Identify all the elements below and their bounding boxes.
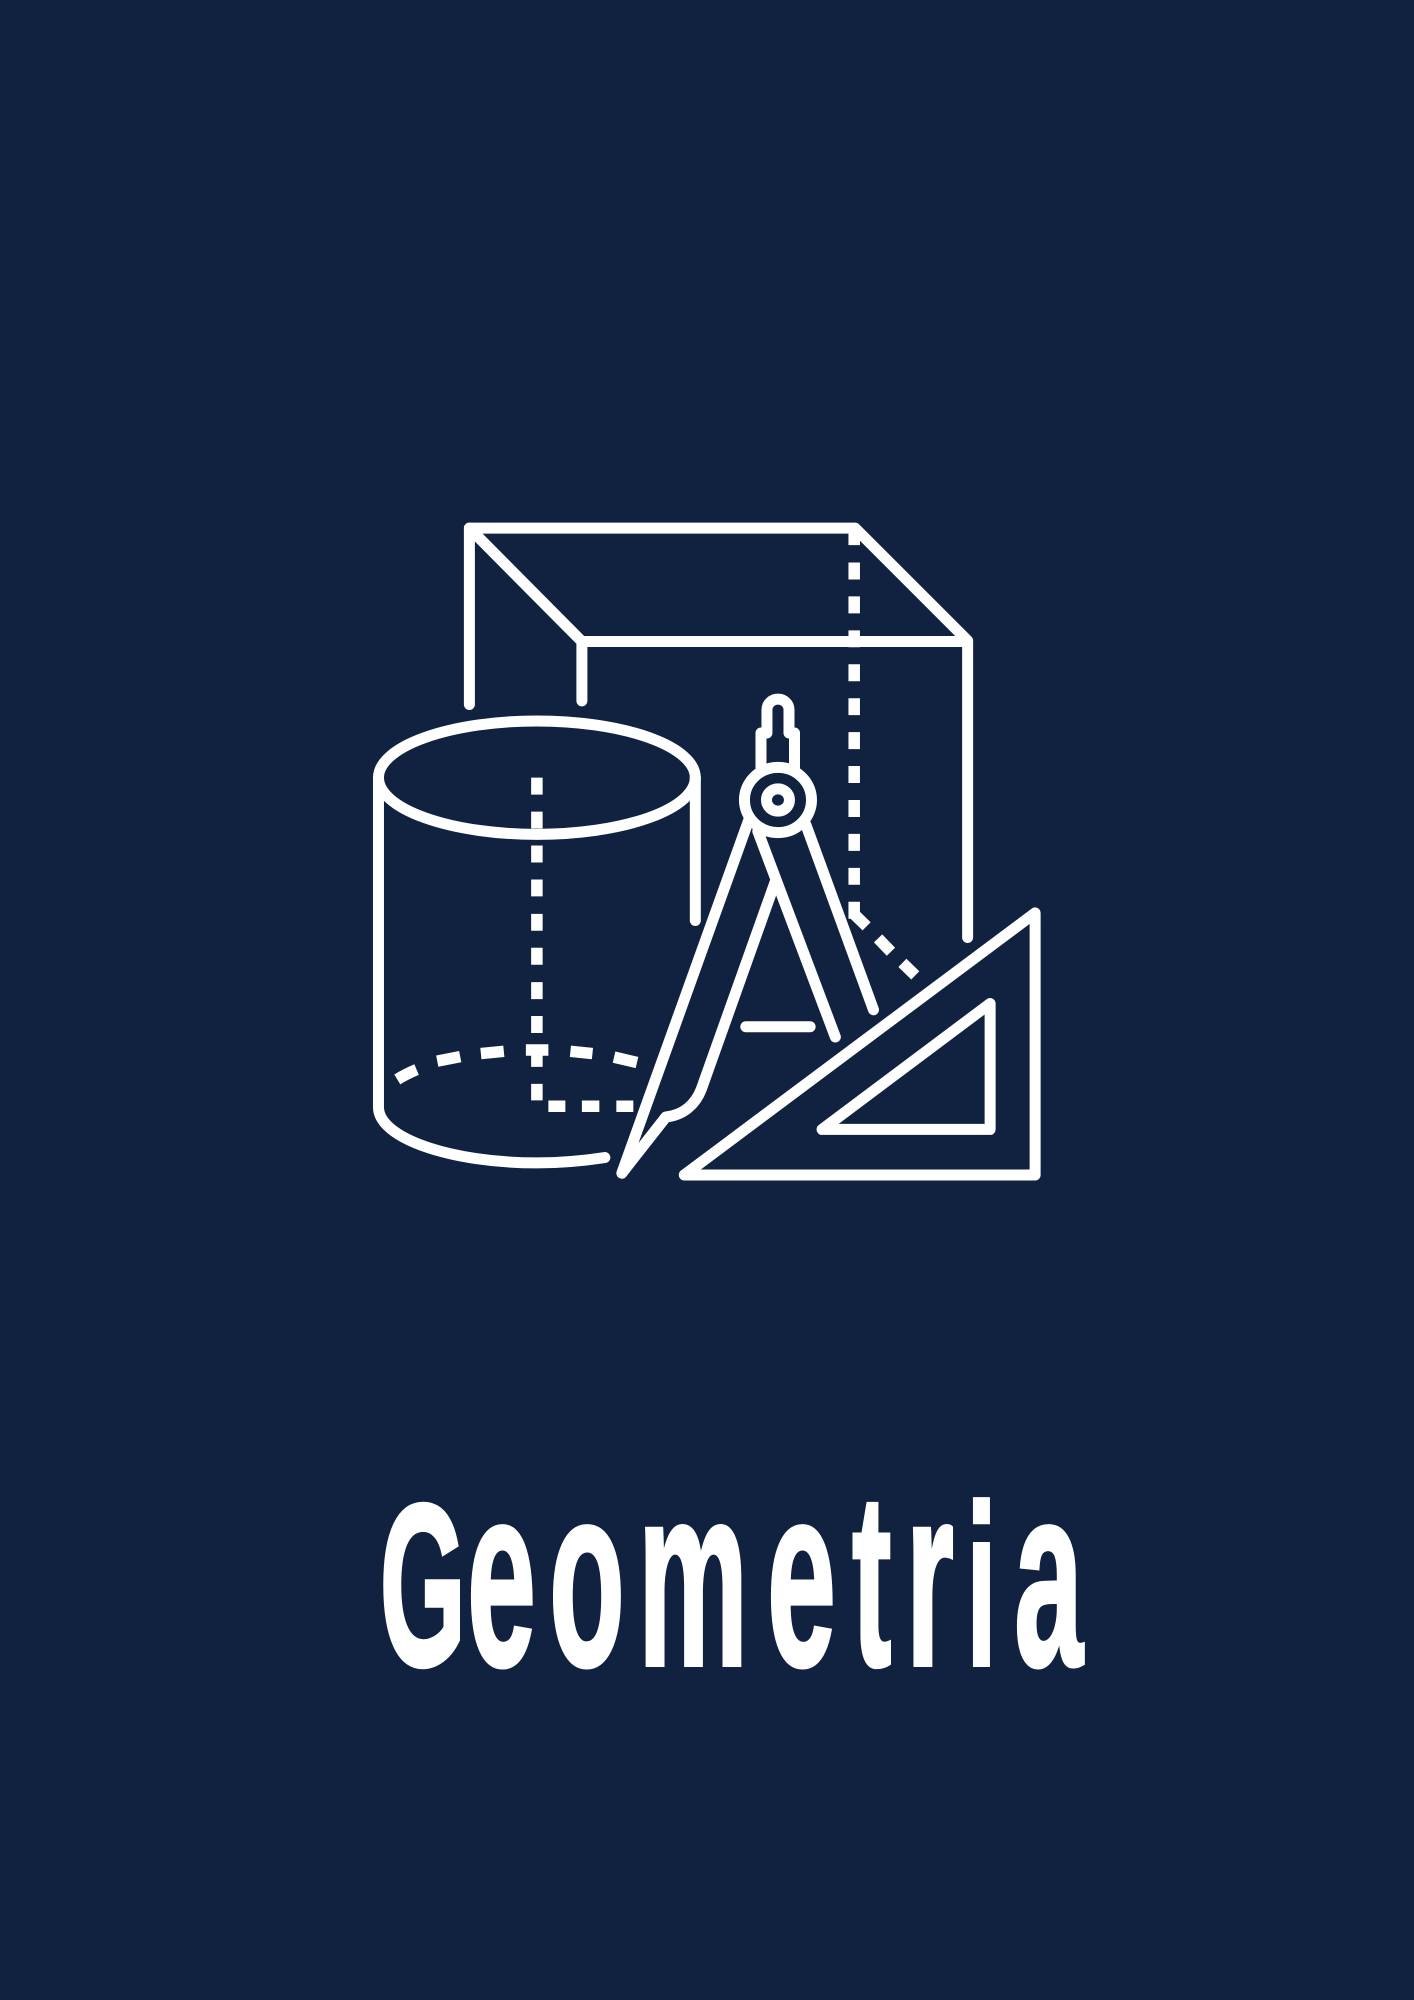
title: t bbox=[852, 1443, 891, 1719]
icon: cylinder outline bbox=[378, 721, 695, 1163]
icon: cube hidden edges (dashed) bbox=[853, 533, 915, 975]
title: G bbox=[380, 1457, 466, 1715]
icon: cylinder hidden axis and base (dashed) bbox=[397, 778, 637, 1106]
icon: cube outline bbox=[469, 528, 968, 937]
title: eome bbox=[467, 1432, 836, 1720]
title: a bbox=[1014, 1432, 1084, 1720]
title: r bbox=[906, 1432, 954, 1720]
icon: drawing compass bbox=[622, 699, 873, 1173]
icon: geometry tools illustration bbox=[378, 528, 1035, 1175]
title: i bbox=[966, 1458, 997, 1715]
icon: set square bbox=[684, 913, 1035, 1175]
